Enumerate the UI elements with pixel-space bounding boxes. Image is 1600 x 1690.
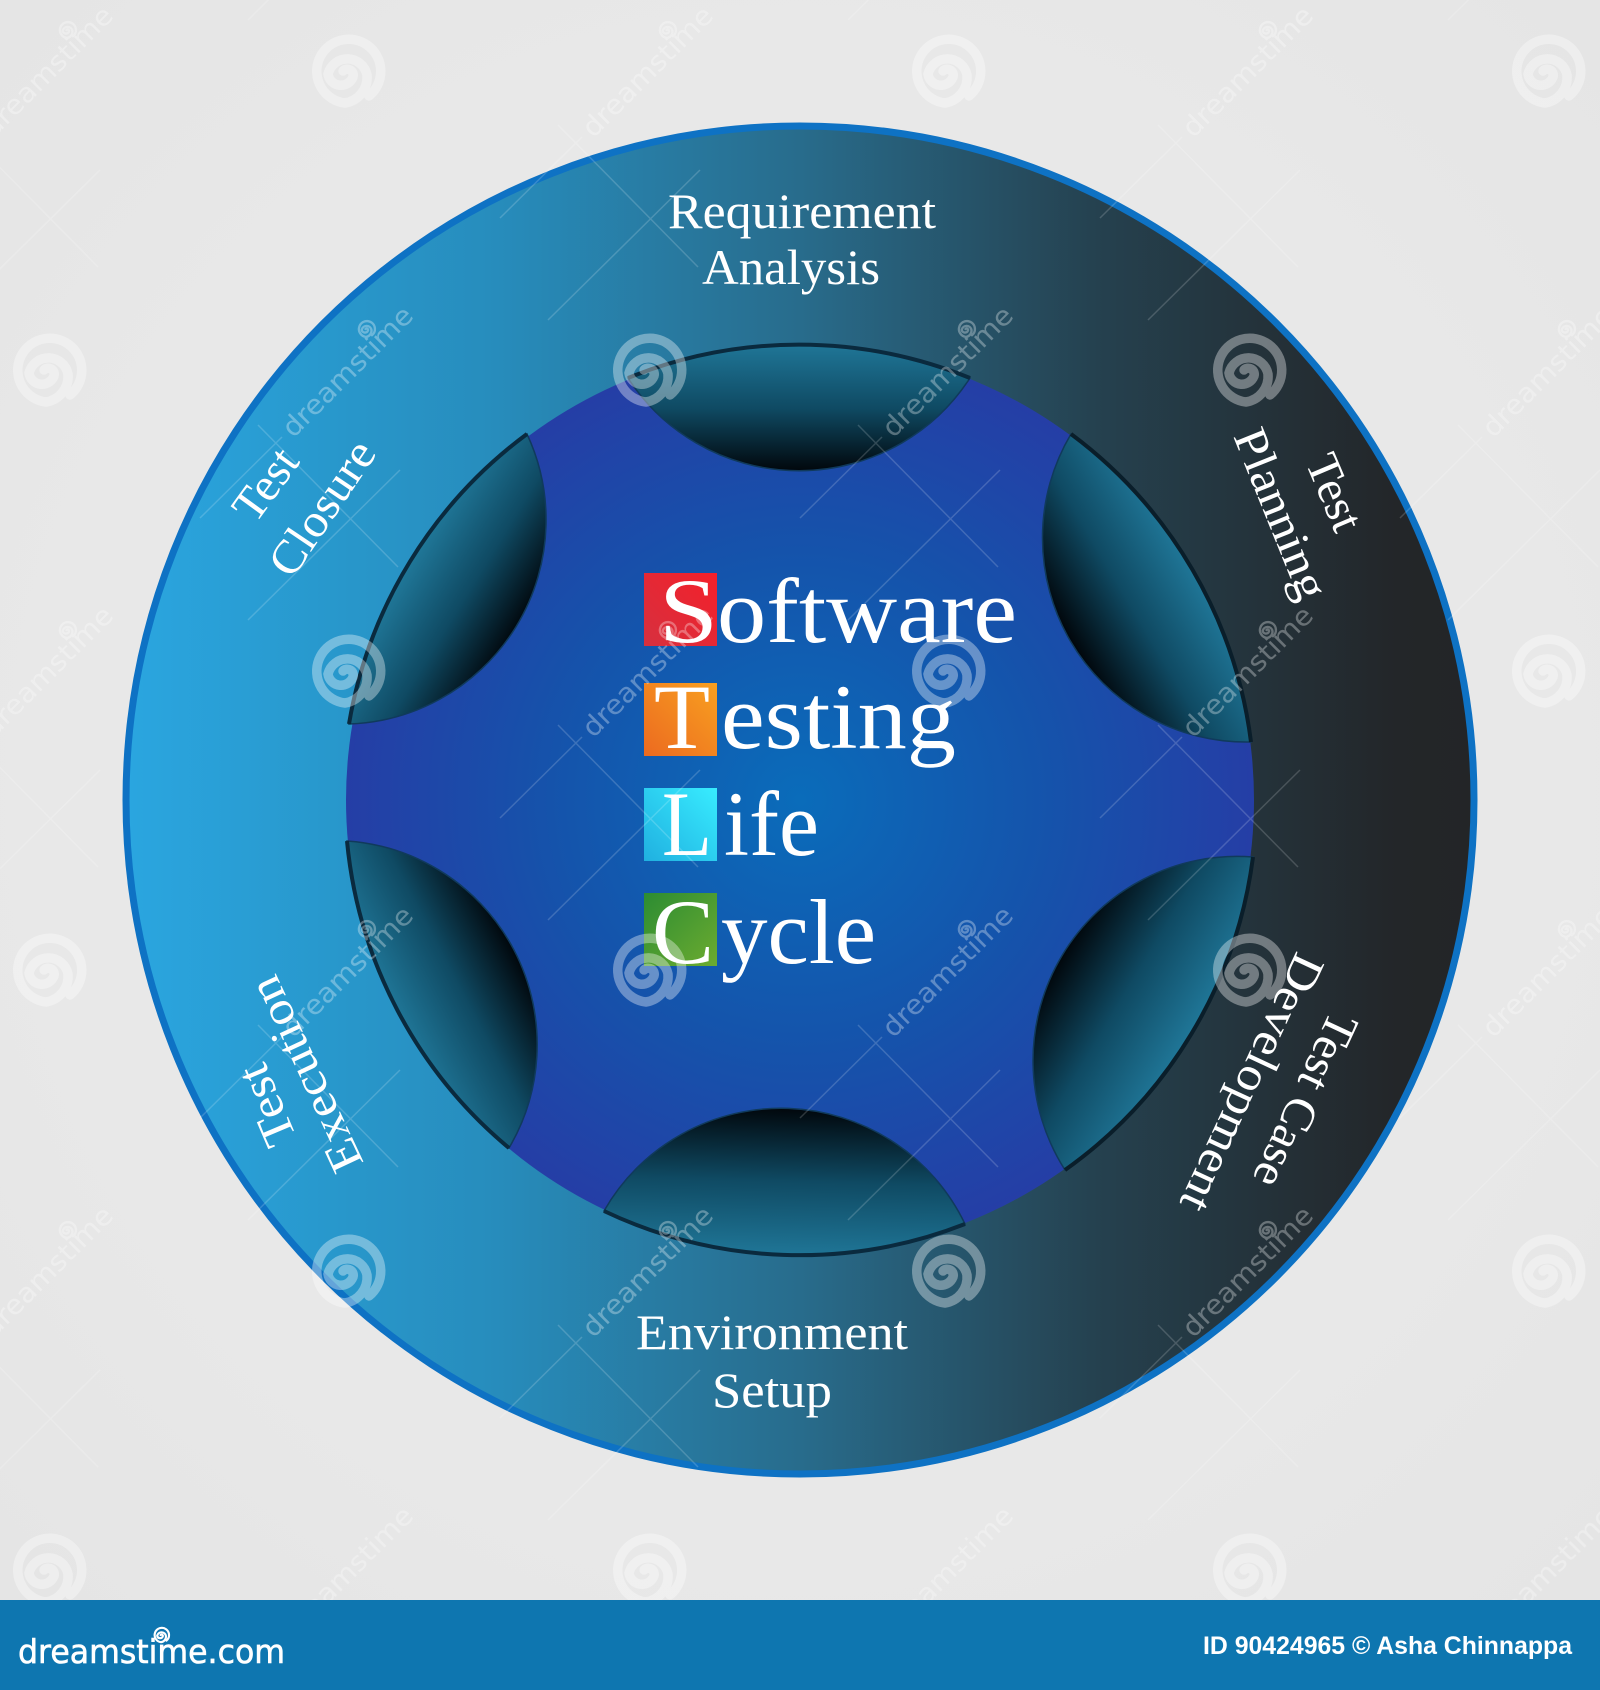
label: Requirement Analysis (668, 183, 936, 295)
label: Environment Setup: Environment (636, 1304, 908, 1360)
word: Testing: esting (721, 666, 956, 768)
notch: bottom (604, 1108, 965, 1255)
label: Test Closure: Test (222, 438, 310, 531)
label: Requirement Analysis: Analysis (702, 239, 880, 295)
watermark: dreamstime text: dreamstime (576, 600, 720, 744)
label: Test Planning (1223, 421, 1374, 607)
label: Test Execution: Test (226, 1056, 307, 1154)
watermark: dreamstime text: dreamstime (576, 1200, 720, 1344)
watermark: dreamstime text: dreamstime (276, 900, 420, 1044)
label: Test Case Development: Test Case (1242, 1004, 1368, 1196)
watermark: dreamstime text: dreamstime (876, 1500, 1020, 1644)
notch: bottom left (347, 841, 537, 1148)
watermark: dreamstime text: dreamstime (276, 300, 420, 444)
watermark: dreamstime text: dreamstime (576, 0, 720, 144)
footer credit: ID 90424965 © Asha Chinnappa (1203, 1632, 1573, 1660)
notch: top (628, 345, 970, 471)
label: Test Execution: Execution (238, 968, 374, 1180)
watermark: dreamstime text: dreamstime (1176, 600, 1320, 744)
T tile (644, 683, 717, 756)
label: Environment Setup (636, 1304, 908, 1418)
notch: top left (349, 434, 546, 724)
outer ring (126, 126, 1474, 1474)
word: Life: ife (724, 773, 819, 875)
label: Test Planning: Test (1295, 446, 1374, 539)
notch: bottom right (1033, 856, 1253, 1170)
label: Environment Setup: Setup (712, 1362, 832, 1418)
word: Cycle: ycle (721, 881, 876, 983)
title: Software Testing Life Cycle (644, 560, 1017, 983)
watermark: dreamstime text: dreamstime (1176, 1200, 1320, 1344)
watermark: dreamstime text: dreamstime (876, 300, 1020, 444)
watermark: dreamstime text: dreamstime (276, 1500, 420, 1644)
footer logo text: dreamstime.com (18, 1632, 285, 1671)
word: Life: L (662, 773, 712, 875)
word: Software: S (659, 560, 718, 662)
watermark: dreamstime text: dreamstime (876, 900, 1020, 1044)
footer bar (0, 1600, 1600, 1690)
S tile (644, 573, 717, 646)
label: Test Planning: Planning (1223, 421, 1338, 607)
label: Test Closure: Closure (258, 430, 387, 586)
footer logo spiral (155, 1628, 169, 1642)
label: Requirement Analysis: Requirement (668, 183, 936, 239)
word: Cycle: C (652, 881, 714, 983)
watermark: dreamstime text: dreamstime (1176, 0, 1320, 144)
notch: top right (1042, 434, 1251, 742)
word: Testing: T (654, 666, 710, 768)
C tile (644, 893, 717, 966)
central blue disc (346, 346, 1254, 1254)
L tile (644, 788, 717, 861)
word: Software: oftware (717, 560, 1017, 662)
label: Test Case Development: Development (1169, 945, 1334, 1220)
